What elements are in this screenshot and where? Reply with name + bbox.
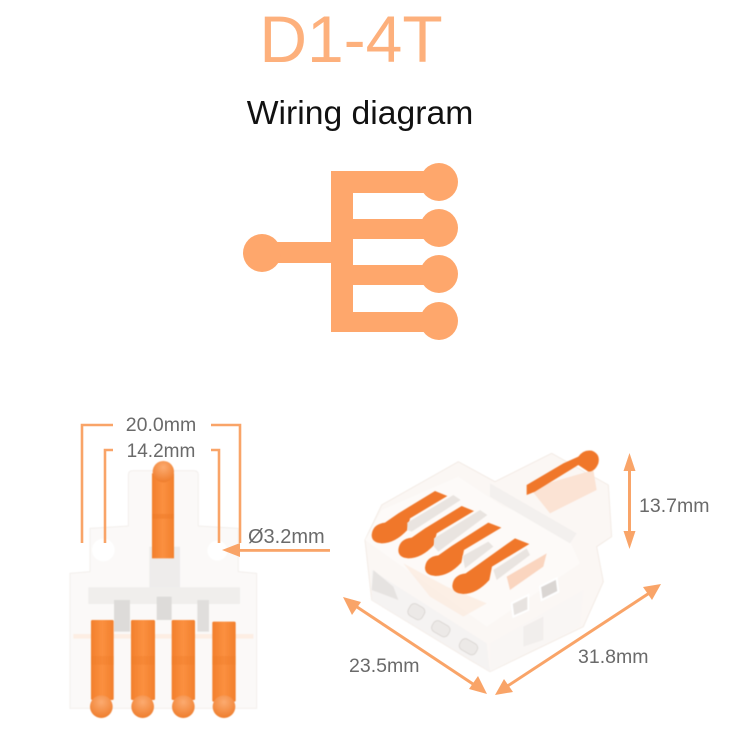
label: 23.5mm: 23.5mm — [349, 655, 419, 677]
dimension brackets, front view — [82, 425, 240, 543]
subtitle: wiring diagram: Wiring diagram — [247, 94, 473, 132]
label: 13.7mm: 13.7mm — [639, 495, 709, 517]
arrow: width 31.8mm — [500, 588, 657, 691]
bottom levers — [90, 620, 236, 718]
label: 31.8mm: 31.8mm — [578, 646, 648, 668]
arrow: depth 23.5mm — [348, 601, 482, 690]
top lever — [152, 461, 174, 558]
arrowheads: depth — [343, 597, 487, 694]
wiring diagram schematic — [243, 163, 458, 340]
label: 20.0mm: 20.0mm — [126, 414, 196, 436]
transparent housing — [365, 453, 612, 672]
label: 14.2mm: 14.2mm — [127, 441, 195, 462]
arrow: height 13.7mm — [624, 453, 636, 549]
connector front view — [70, 461, 257, 718]
top lever — [527, 450, 599, 495]
title: D1-4T — [259, 2, 443, 76]
arrow: hole diameter — [222, 543, 330, 557]
arrowheads: width — [495, 584, 661, 695]
lever bridges — [407, 495, 530, 580]
front levers — [372, 491, 529, 594]
transparent housing — [70, 471, 257, 708]
connector perspective view — [365, 450, 612, 672]
label: hole diameter: Ø3.2mm — [248, 526, 325, 548]
